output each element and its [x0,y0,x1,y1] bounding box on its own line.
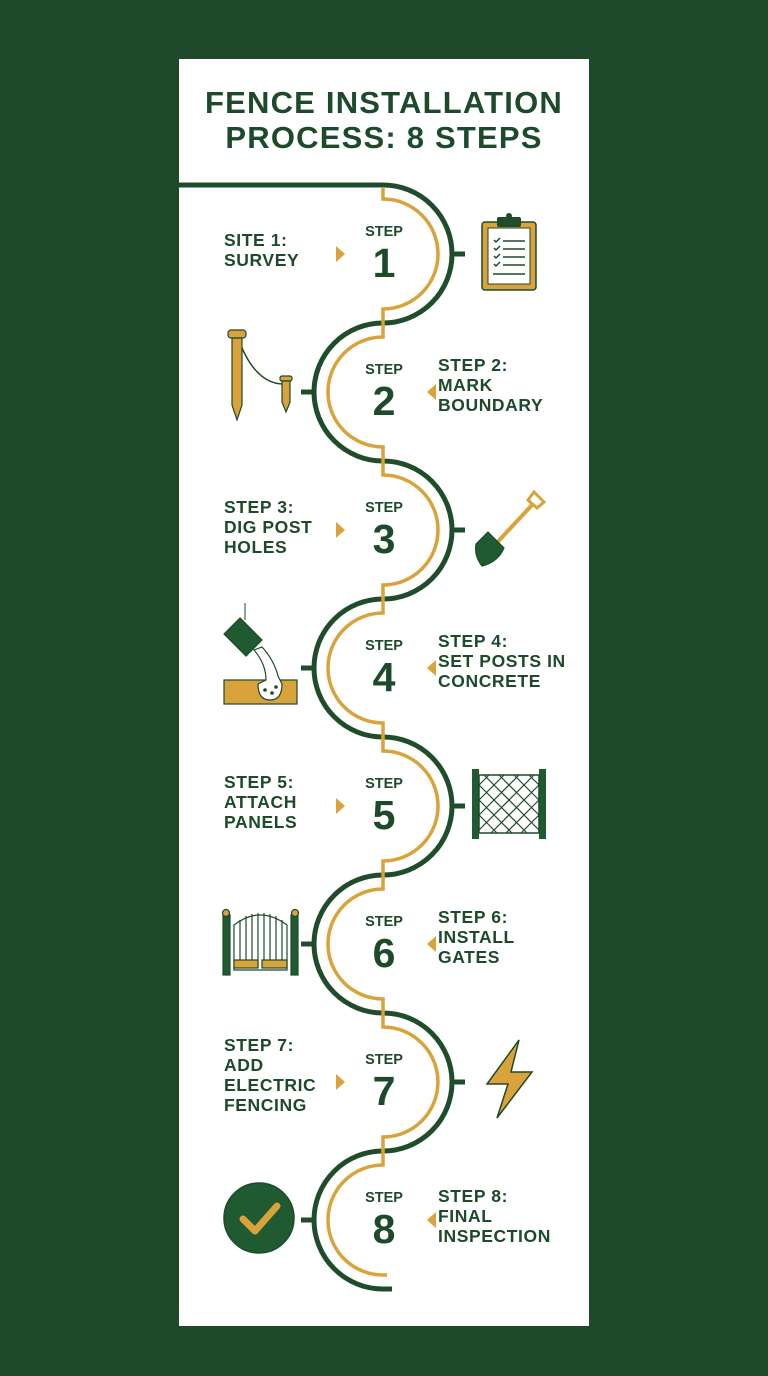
icon: fence panel [472,769,546,839]
icon: concrete [224,603,297,704]
step numbers: STEP [365,914,403,930]
step labels: STEP 8: [438,1186,508,1206]
step labels: STEP 4: [438,631,508,651]
step numbers: STEP [365,1190,403,1206]
step labels: STEP 3: [224,497,294,517]
step numbers: 6 [373,930,395,976]
step numbers: 3 [373,516,395,562]
step labels: FENCING [224,1095,307,1115]
step labels: STEP 7: [224,1035,294,1055]
step labels: BOUNDARY [438,395,543,415]
step labels: SITE 1: [224,230,288,250]
step labels: INSTALL [438,927,515,947]
icon: clipboard [482,213,536,290]
step numbers: STEP [365,500,403,516]
step numbers: 5 [373,792,395,838]
icon: check circle [224,1183,294,1253]
step numbers: 8 [373,1206,395,1252]
arrows [336,246,436,1228]
step labels: FINAL [438,1206,493,1226]
step labels: DIG POST [224,517,312,537]
step numbers: STEP [365,224,403,240]
icon: gate [222,910,298,975]
icon: stakes [228,330,292,420]
step labels: PANELS [224,812,297,832]
card [179,59,589,1326]
step labels: ATTACH [224,792,297,812]
step labels: CONCRETE [438,671,541,691]
step labels: ELECTRIC [224,1075,316,1095]
step labels: HOLES [224,537,287,557]
step numbers: STEP [365,776,403,792]
step labels: MARK [438,375,493,395]
step labels: STEP 2: [438,355,508,375]
icon: lightning bolt [487,1040,532,1118]
title: PROCESS: 8 STEPS [225,120,543,155]
step numbers [365,224,403,1252]
step labels: ADD [224,1055,264,1075]
step numbers: STEP [365,638,403,654]
step numbers: 1 [373,240,395,286]
wavy timeline [179,185,465,1289]
step labels: SET POSTS IN [438,651,566,671]
icon: shovel [476,492,544,566]
step labels [224,230,566,1246]
step numbers: STEP [365,362,403,378]
step labels: STEP 6: [438,907,508,927]
step labels: SURVEY [224,250,299,270]
step numbers: 2 [373,378,395,424]
step numbers: 4 [373,654,396,700]
step labels: GATES [438,947,500,967]
step labels: STEP 5: [224,772,294,792]
step labels: INSPECTION [438,1226,551,1246]
title [205,85,563,155]
step numbers: 7 [373,1068,395,1114]
title: FENCE INSTALLATION [205,85,563,120]
step numbers: STEP [365,1052,403,1068]
